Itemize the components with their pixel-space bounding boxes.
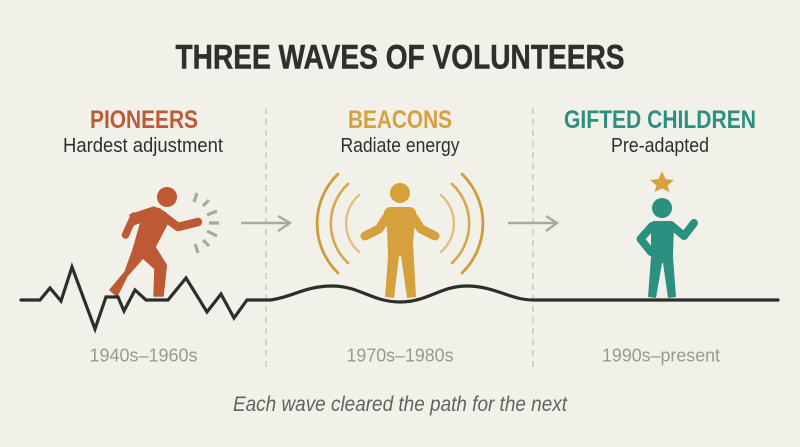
icon: radiating figure xyxy=(317,174,483,298)
panel: beacons xyxy=(317,106,483,366)
icon: striving figure xyxy=(110,187,198,296)
caption: Each wave cleared the path for the next xyxy=(233,392,568,416)
heading: gifted children: GIFTED CHILDREN xyxy=(564,106,756,134)
title: THREE WAVES OF VOLUNTEERS xyxy=(176,38,624,76)
arrow: pioneers to beacons xyxy=(241,216,290,231)
subtitle: radiate energy: Radiate energy xyxy=(340,135,460,157)
icon: standing figure xyxy=(640,198,694,298)
date: 1990s-present: 1990s–present xyxy=(602,344,720,366)
heading: pioneers: PIONEERS xyxy=(90,106,198,134)
panel: pioneers xyxy=(63,106,223,366)
icon: star xyxy=(650,171,674,192)
date: 1940s-1960s: 1940s–1960s xyxy=(90,344,198,366)
subtitle: pre-adapted: Pre-adapted xyxy=(611,135,709,157)
arrow: beacons to gifted children xyxy=(508,216,557,231)
waves xyxy=(317,174,483,273)
date: 1970s-1980s: 1970s–1980s xyxy=(346,344,454,366)
subtitle: hardest adjustment: Hardest adjustment xyxy=(63,135,223,157)
chart: wave line from turbulent to calm xyxy=(21,267,778,329)
panel: gifted children xyxy=(564,106,756,366)
icon: impact sparks xyxy=(194,193,219,253)
heading: beacons: BEACONS xyxy=(348,106,452,134)
